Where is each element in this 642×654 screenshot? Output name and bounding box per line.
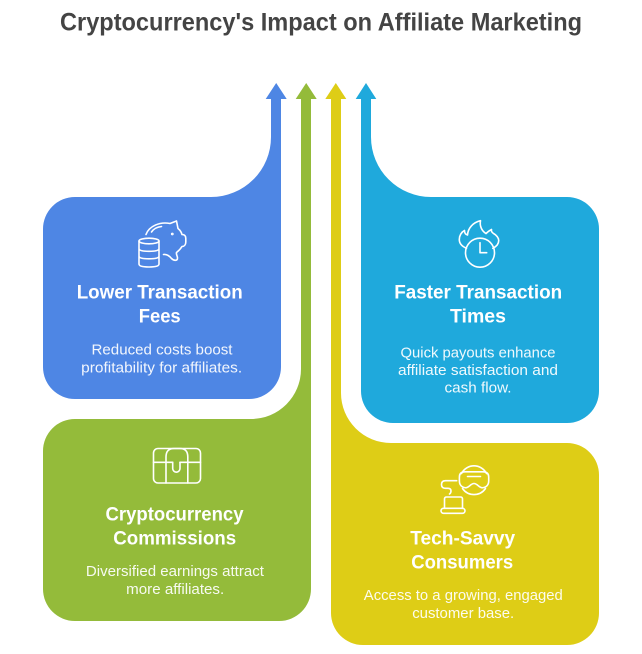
panel: faster transaction times (356, 83, 599, 423)
icon: clock with flame (459, 221, 499, 267)
icon: treasure chest (154, 448, 200, 483)
heading: lower transaction fees: Fees (139, 306, 181, 328)
description: tech-savvy consumers: customer base. (412, 605, 514, 622)
panel: lower transaction fees (43, 83, 287, 399)
description: faster transaction times: cash flow. (444, 380, 512, 397)
heading: lower transaction fees: Lower Transaction (77, 282, 243, 304)
heading: cryptocurrency commissions: Cryptocurrency (106, 504, 244, 526)
description: tech-savvy consumers: Access to a growing, engaged (364, 587, 563, 604)
panel shape and arrow: cyan (356, 83, 599, 423)
heading: faster transaction times: Times (450, 306, 506, 328)
description: faster transaction times: Quick payouts enhance (400, 344, 556, 361)
heading: faster transaction times: Faster Transaction (394, 282, 562, 304)
panel shape and arrow: yellow (325, 83, 599, 645)
icon: coins and piggy bank (139, 221, 186, 267)
panel: tech-savvy consumers (325, 83, 599, 645)
panel: cryptocurrency commissions (43, 83, 317, 621)
description: cryptocurrency commissions: Diversified earnings attract (86, 563, 265, 580)
description: cryptocurrency commissions: more affiliates. (126, 581, 224, 598)
description: lower transaction fees: Reduced costs boost (92, 341, 233, 358)
title: Cryptocurrency's Impact on Affiliate Marketing (60, 8, 582, 36)
description: lower transaction fees: profitability for affiliates. (81, 359, 242, 376)
heading: tech-savvy consumers: Tech-Savvy (410, 528, 515, 550)
panel shape and arrow: blue (43, 83, 287, 399)
icon: VR headset and laptop (441, 466, 489, 513)
panel shape and arrow: green (43, 83, 317, 621)
heading: cryptocurrency commissions: Commissions (113, 528, 236, 550)
description: faster transaction times: affiliate satisfaction and (398, 362, 558, 379)
heading: tech-savvy consumers: Consumers (411, 552, 513, 574)
